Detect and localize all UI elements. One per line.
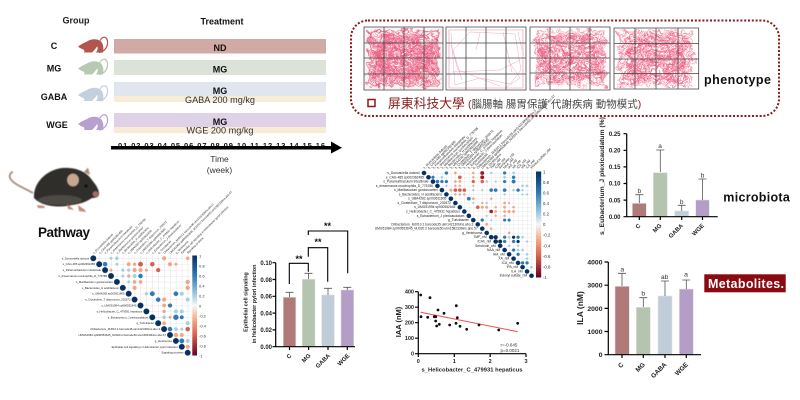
heatmap color scale: -0.6 <box>543 254 551 259</box>
error bars <box>286 273 351 297</box>
row: C group <box>51 37 326 54</box>
y axis ticks: 0.10 <box>609 182 621 188</box>
heatmap column labels: s_Paramuribaculum intestinale <box>103 225 134 255</box>
heatmap column labels <box>422 94 556 170</box>
heatmap column labels: s_UBA4282 sp003611805 <box>127 229 153 255</box>
x axis labels: WGE <box>692 223 706 238</box>
x axis labels <box>286 353 351 370</box>
row: WGE group <box>46 113 326 136</box>
error bars <box>635 150 706 211</box>
x axis labels: C <box>617 361 626 370</box>
x axis ticks: 1 <box>453 359 456 365</box>
x axis label: s_Helicobacter_C_479931 hepaticus <box>422 368 522 374</box>
heatmap row labels <box>58 256 184 355</box>
heatmap row labels: s_UBA4282 sp003611805 <box>408 197 447 201</box>
heatmap color scale: 1 <box>199 254 202 258</box>
y axis label line two: in Helicobacter pylori infection <box>252 265 258 343</box>
open field trace: WGE <box>614 28 699 89</box>
y axis ticks: 0 <box>599 352 603 359</box>
heatmap color scale: 0.8 <box>543 180 550 185</box>
heatmap row labels: s_Eubacterium_J plexicaudatum <box>417 214 465 218</box>
label: phenotype: phenotype <box>704 73 771 87</box>
regression line <box>421 312 518 332</box>
heatmap column labels: Serotonin_nM <box>498 152 515 170</box>
marker: square bullet <box>368 100 375 106</box>
heatmap column labels: s_UMG51994 sp900552645 <box>139 227 167 255</box>
heatmap color scale: 0.2 <box>543 212 550 216</box>
heatmap grid and circles <box>90 255 191 356</box>
heatmap row labels: g_Ventrisoma <box>462 231 482 235</box>
heatmap row labels: g_Turicibacter <box>136 321 154 325</box>
y axis label: Epithelial cell signaling <box>244 272 250 332</box>
heatmap color scale <box>536 170 551 280</box>
heatmap row labels: Signaling proteins <box>161 351 184 355</box>
chart: ILA bars <box>575 260 701 380</box>
heatmap column labels <box>92 190 233 255</box>
heatmap row labels: s_Duncaniella dubosii <box>387 171 420 175</box>
y axis ticks <box>609 132 621 221</box>
row: MG group: MG <box>47 64 61 74</box>
heatmap row labels: s_dnsermanos mucinophila_D_776786 <box>376 184 433 188</box>
y axis ticks: 0.05 <box>609 198 621 204</box>
heatmap row labels: UMG51984 sp900553645_MJ020.2 barcode50.ulm158233bins.abo.57 <box>79 333 166 337</box>
heatmap column labels: s_Bacteroides_H acidifaciens <box>445 136 479 170</box>
significance letters: a <box>658 143 662 150</box>
panel: treatment schedule <box>41 16 342 175</box>
significance stars: ** <box>314 237 322 247</box>
significance brackets <box>289 231 348 284</box>
heatmap color scale <box>192 254 207 358</box>
panel: open field phenotype <box>351 20 779 116</box>
heatmap column labels: s_Duncaniella dubosii <box>92 232 114 255</box>
row: WGE group: WGE <box>46 120 68 130</box>
y axis label: s_Eubacterium_J plexicaudatum (%) <box>599 117 606 235</box>
x axis labels: C <box>286 353 294 360</box>
heatmap column labels: s_UBA4282 sp003611805 <box>449 140 479 170</box>
heatmap column labels: s_CAG-485 sp002362485 <box>427 140 457 170</box>
y axis ticks: 0.06 <box>260 295 273 301</box>
heatmap column labels: IPA_nM <box>520 159 532 170</box>
heatmap color scale: -0.2 <box>199 314 207 318</box>
heatmap row labels: NAA_nM <box>487 248 500 252</box>
heatmap row labels: s_Helicobacter_C_479931 hepaticus <box>97 309 143 313</box>
row: WGE group: MG <box>213 117 227 127</box>
heatmap column labels: NAA_nM <box>502 157 515 170</box>
heatmap color scale: 0.4 <box>199 284 205 288</box>
row: MG group <box>47 59 326 75</box>
heatmap row labels: g_Turicibacter <box>448 218 470 222</box>
row: GABA group <box>41 82 326 105</box>
x axis ticks: 2 <box>489 359 492 365</box>
y axis ticks: 300 <box>405 305 414 311</box>
y axis ticks: 1000 <box>587 329 603 336</box>
heatmap column labels: UMG51984 sp900553645_MJ020.2 barcode50.ulm158233bins.abo.57 <box>168 190 233 255</box>
chart: Eubacterium abundance bars <box>599 117 718 240</box>
dotted rounded frame <box>351 20 779 116</box>
x axis labels: GABA <box>668 223 685 240</box>
heatmap row labels: s_UBA4282 sp003611805 <box>92 292 125 296</box>
heatmap color scale: 1 <box>543 170 546 174</box>
heatmap color scale: 0.2 <box>199 294 205 298</box>
heatmap column labels: g_Turicibacter <box>157 239 172 255</box>
statistics note: r=-0.645 <box>500 342 517 348</box>
heatmap column labels: Oribacterium_MJ010.1 barcode35.ulm142130bins.abo.3 <box>162 202 215 255</box>
y axis ticks: 200 <box>405 321 414 327</box>
heatmap color scale: -0.8 <box>543 264 551 270</box>
y axis ticks: 0.00 <box>260 345 273 351</box>
axes <box>415 292 526 357</box>
chart: epithelial cell signaling bars <box>244 221 355 370</box>
row: C group: C <box>51 41 58 51</box>
heatmap row labels: s_Clostridium_T disporicum_202672 <box>397 201 451 205</box>
axis label: time: Time <box>210 154 229 164</box>
label: microbiota: microbiota <box>723 190 791 204</box>
x axis ticks <box>417 359 528 365</box>
heatmap column labels: XA_nM <box>511 159 522 170</box>
significance stars: ** <box>324 221 331 231</box>
heatmap row labels: s_Marlibaculum gordoncarteri <box>394 188 438 192</box>
heatmap column labels: s_Duncaniella dubosii <box>422 144 448 170</box>
heatmap row labels: g_Ventrisoma <box>155 339 172 343</box>
heatmap column labels: IAA_nM <box>507 158 518 170</box>
heatmap color scale: -0.4 <box>199 324 207 328</box>
heatmap column labels: s_dnsermanos mucinophila_D_776786 <box>436 126 479 170</box>
heatmap row labels: IPA_nM <box>507 265 518 269</box>
heatmap color scale: 0.4 <box>543 201 550 206</box>
x axis labels: C <box>635 223 643 230</box>
bars <box>283 279 354 347</box>
chart: metabolite microbiota correlation heatmap <box>375 94 556 280</box>
heatmap column labels: s_Paramuribaculum intestinale <box>431 135 466 170</box>
heatmap color scale: -0.2 <box>543 232 551 238</box>
heatmap color scale: -1 <box>199 354 203 358</box>
significance letters <box>637 143 705 206</box>
y axis ticks: 0.00 <box>609 215 621 221</box>
heatmap row labels: s_CAG-485 sp002362485 <box>386 175 424 179</box>
heatmap column labels: TMP_nM <box>489 157 502 170</box>
axis label: time: (week) <box>207 165 232 175</box>
bars <box>632 173 709 217</box>
heatmap column labels: s_Helicobacter_C_479931 hepaticus <box>462 129 504 170</box>
x axis labels: MG <box>635 361 647 374</box>
heatmap row labels: s_Bacteroides_H acidifaciens <box>82 286 119 290</box>
y axis ticks: 0 <box>411 352 414 358</box>
y axis ticks: 0.20 <box>609 148 621 154</box>
y axis ticks: 0.04 <box>260 311 273 317</box>
chart: pathway correlation heatmap <box>58 190 233 358</box>
row: GABA group: GABA <box>41 92 68 102</box>
significance letters: a <box>620 266 624 274</box>
institution name: 屏東科技大學 <box>388 96 465 111</box>
heatmap column labels: s_Eubacterium_J plexicaudatum <box>467 133 504 170</box>
heatmap column labels: Indoxyl sulfate_nM <box>529 147 552 170</box>
heading: pathway: Pathway <box>38 225 90 240</box>
heatmap row labels: s_Helicobacter_C_479931 hepaticus <box>406 210 460 214</box>
x axis ticks: 0 <box>417 359 420 365</box>
heatmap color scale: -0.6 <box>199 334 207 338</box>
heatmap row labels: Serotonin_nM <box>475 244 496 248</box>
heatmap column labels: s_Eubacterium_J plexicaudatum <box>151 223 183 255</box>
heatmap row labels: ILA_nM <box>511 269 523 273</box>
heatmap row labels: IAA_nM <box>493 252 505 256</box>
heatmap row labels <box>375 171 527 278</box>
heatmap row labels: TMP_nM <box>473 235 487 239</box>
heatmap row labels: Epithelial cell signaling in Helicobacter pylori infection <box>112 345 178 349</box>
significance letters <box>620 266 688 298</box>
statistics note: p=0.0021 <box>500 348 520 353</box>
bars <box>615 286 693 355</box>
y axis ticks: 4000 <box>587 260 603 266</box>
heatmap row labels: Indoxyl sulfate_nM <box>500 274 527 278</box>
heatmap row labels: UMG51984 sp900553645_MJ020.2 barcode50.ulm158233bins.abo.57 <box>375 227 478 231</box>
heatmap column labels: s_Helicobacter_C_479931 hepaticus <box>145 219 180 255</box>
significance letters: b <box>637 188 641 195</box>
y axis ticks <box>587 260 603 359</box>
heatmap column labels: UMG51984 sp900553645_MJ020.2 barcode50.ulm158233bins.abo.57 <box>480 94 556 170</box>
data points <box>419 294 519 331</box>
x axis labels <box>635 223 706 240</box>
significance stars <box>295 221 331 264</box>
heatmap grid and circles <box>422 171 534 278</box>
heatmap row labels: s_UMG51994 sp900552645 <box>101 304 137 308</box>
heatmap column labels: Signaling proteins <box>186 236 205 255</box>
y axis ticks: 100 <box>405 336 414 342</box>
open field trace: GABA <box>530 27 610 90</box>
row: C group: ND <box>214 43 227 53</box>
row: WGE group: WGE 200 mg/kg <box>186 126 254 136</box>
heatmap color scale: -1 <box>543 275 547 280</box>
y axis ticks: 0.02 <box>260 328 273 334</box>
heatmap column labels: s_Clostridium_T disporicum_202672 <box>454 129 495 170</box>
y axis label: IAA (nM) <box>394 306 403 337</box>
open field trace: C <box>364 27 443 90</box>
arrow: timeline <box>111 142 342 154</box>
x axis labels: MG <box>301 353 313 364</box>
heatmap row labels: s_Duncaniella dubosii <box>62 256 89 260</box>
heatmap column labels: ILA_nM <box>525 159 536 170</box>
row: MG group: MG <box>213 64 227 74</box>
x axis labels: MG <box>652 223 664 234</box>
heatmap column labels: s_Clostridium_T disporicum_202672 <box>133 220 168 255</box>
significance letters: b <box>701 172 705 180</box>
timeline week numbers: 01 02 03 04 05 06 07 08 09 10 11 12 13 14 15 16 <box>118 141 325 150</box>
axes <box>272 263 355 350</box>
heatmap row labels: s_Eubacterium_J plexicaudatum <box>108 315 149 319</box>
heatmap row labels: s_Bacteroides_H acidifaciens <box>399 192 442 196</box>
x axis labels: WGE <box>337 353 351 368</box>
x axis labels <box>617 361 690 380</box>
significance letters: a <box>684 272 688 278</box>
heading: group: Group <box>62 16 90 26</box>
row: GABA group: MG <box>213 86 227 96</box>
significance letters: b <box>641 290 645 298</box>
heatmap column labels: g_Ventrisoma <box>174 239 190 255</box>
heatmap column labels: g_Ventrisoma <box>485 153 502 170</box>
y axis ticks: 400 <box>405 290 414 296</box>
chart: IAA scatter plot <box>394 290 528 374</box>
significance letters: ab <box>661 274 669 281</box>
y axis ticks: 0.25 <box>609 132 621 138</box>
heatmap row labels: s_Marlibaculum gordoncarteri <box>76 280 113 284</box>
heatmap color scale: -0.8 <box>199 344 207 348</box>
heatmap row labels: s_Clostridium_T disporicum_202672 <box>85 298 131 302</box>
callout: metabolites: Metabolites. <box>708 277 784 291</box>
heatmap column labels: s_Bacteroides_H acidifaciens <box>121 226 150 255</box>
heatmap column labels: Epithelial cell signaling in Helicobacter pylori infection <box>180 205 230 255</box>
x axis labels: WGE <box>674 361 690 377</box>
heatmap column labels: ICAh_nM <box>494 157 507 170</box>
heatmap row labels: s_Paramuribaculum intestinale <box>383 180 429 184</box>
heatmap row labels: ICAh_nM <box>477 240 491 244</box>
y axis ticks: 3000 <box>587 283 603 290</box>
heatmap color scale: -0.4 <box>543 244 551 248</box>
axes <box>624 134 718 220</box>
heatmap column labels: s_UMG51994 sp900552645 <box>458 138 490 170</box>
significance letters: b <box>680 199 684 206</box>
y axis ticks: 0.08 <box>260 278 273 284</box>
heatmap row labels: Oribacterium_MJ010.1 barcode35.ulm142130bins.abo.3 <box>391 222 473 226</box>
x axis labels: GABA <box>650 361 669 380</box>
heatmap row labels: XA_nM <box>498 257 509 261</box>
heatmap column labels: s_dnsermanos mucinophila_D_776786 <box>109 217 147 255</box>
significance stars: ** <box>295 254 303 264</box>
axes <box>604 262 701 358</box>
heatmap column labels: s_Marlibaculum gordoncarteri <box>115 226 145 255</box>
y axis ticks <box>405 290 414 358</box>
x axis ticks: 3 <box>524 359 528 365</box>
heatmap row labels: s_dnsermanos mucinophila_D_776786 <box>58 274 107 278</box>
heatmap color scale: 0.6 <box>543 190 550 196</box>
heatmap row labels: s_Paramuribaculum intestinale <box>63 268 101 272</box>
heatmap column labels: s_CAG-485 sp002362485 <box>98 229 124 255</box>
y axis ticks: 0.10 <box>260 261 273 267</box>
y axis ticks <box>260 261 273 351</box>
heatmap color scale: 0 <box>543 222 546 227</box>
heading: treatment: Treatment <box>200 16 244 26</box>
icon: mouse photo <box>10 168 99 212</box>
heatmap column labels: g_Turicibacter <box>471 152 490 170</box>
heatmap row labels: ICA_nM <box>502 261 514 265</box>
y axis label: ILA (nM) <box>575 291 585 325</box>
heatmap color scale: 0.6 <box>199 274 205 278</box>
research description: (腦腸軸 腸胃保護 代謝疾病 動物模式) <box>468 98 641 110</box>
y axis ticks: 2000 <box>587 306 603 313</box>
heatmap row labels: s_CAG-485 sp002362485 <box>63 262 95 266</box>
heatmap row labels: s_UMG51994 sp900552645 <box>414 205 456 209</box>
x axis labels: GABA <box>315 353 332 370</box>
y axis ticks: 0.15 <box>609 165 621 171</box>
row: GABA group: GABA 200 mg/kg <box>185 95 255 105</box>
error bars <box>618 273 690 307</box>
open field trace: MG <box>446 27 526 90</box>
heatmap color scale: 0 <box>199 304 202 308</box>
heatmap column labels: s_Marlibaculum gordoncarteri <box>440 136 474 170</box>
heatmap column labels: ICA_nM <box>516 158 527 170</box>
heatmap row labels: Oribacterium_MJ010.1 barcode35.ulm142130bins.abo.3 <box>90 327 160 331</box>
heatmap column labels: Oribacterium_MJ010.1 barcode35.ulm142130bins.abo.3 <box>476 109 537 170</box>
heatmap color scale: 0.8 <box>199 264 205 268</box>
